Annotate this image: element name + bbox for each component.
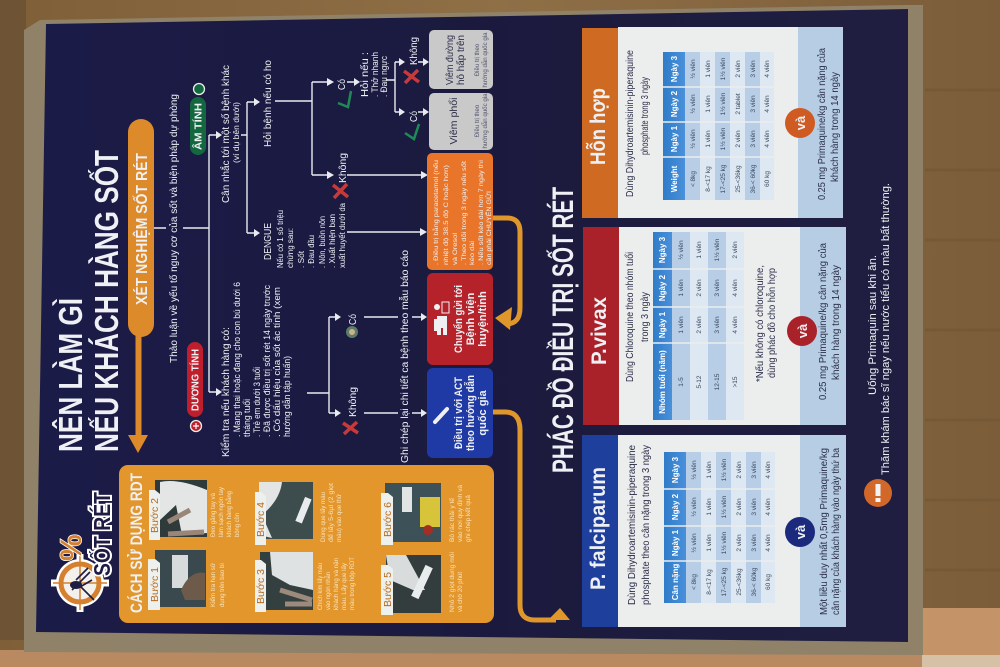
dosage table: 3 viên bbox=[750, 130, 757, 148]
dosage table: Ngày 3 bbox=[671, 456, 680, 483]
step 4 photo bbox=[259, 482, 313, 539]
panel: hỗn hợp bbox=[582, 27, 843, 218]
primaquine note: cân nặng của khách hàng vào ngày thứ ba bbox=[830, 448, 842, 615]
dosage table: 12-15 bbox=[714, 373, 721, 390]
và badge bbox=[785, 108, 815, 138]
dosage table: 1 viên bbox=[705, 95, 712, 113]
text: dengue: . Đau đầu bbox=[306, 235, 316, 268]
box: viêm phổi: hướng dẫn quốc gia bbox=[482, 93, 489, 149]
dosage table: 1 viên bbox=[706, 461, 713, 479]
dosage table: Ngày 1 bbox=[671, 529, 680, 556]
title bbox=[52, 150, 125, 452]
text: dengue: chứng sau: bbox=[285, 228, 295, 268]
dosage table: 1 viên bbox=[678, 316, 685, 334]
box: điều trị sốt (orange): . Theo dõi trong 3 ngày nếu sốt bbox=[459, 161, 468, 265]
intro: Dùng Dihydroartemisinin-piperaquine bbox=[625, 50, 636, 197]
step captions: để lấy 5-6µl (2 giọt bbox=[326, 483, 335, 542]
dosage table: 1 viên bbox=[696, 241, 703, 259]
dosage table: 4 viên bbox=[765, 498, 772, 516]
dosage table: Cân nặng bbox=[671, 564, 680, 600]
box: viêm đường hô hấp trên: Viêm đường bbox=[445, 35, 456, 85]
branch: có (chuyển gửi): Có bbox=[347, 314, 359, 325]
box: điều trị sốt (orange) bbox=[427, 153, 493, 270]
text: hỏi bệnh nếu có ho: Hỏi bệnh nếu có ho bbox=[262, 60, 274, 147]
text: hỏi nếu: . Đau ngực bbox=[379, 56, 390, 97]
icon: syringe bbox=[435, 409, 447, 422]
primaquine note: khách hàng trong 14 ngày bbox=[830, 72, 841, 182]
step tags: Bước 4 bbox=[256, 502, 267, 537]
dosage table: 2 viên bbox=[735, 130, 742, 148]
box: điều trị sốt (orange): và Oresol bbox=[452, 232, 459, 265]
footer notes: Thăm khám bác sĩ ngay nếu nước tiểu có màu bất thường. bbox=[880, 183, 892, 475]
dosage table: 4 viên bbox=[765, 534, 772, 552]
box: viêm phổi bbox=[429, 93, 493, 150]
dosage table: Ngày 2 bbox=[670, 90, 679, 117]
text: kiểm tra nếu khách hàng có: Kiểm tra nếu khách hàng có: bbox=[220, 327, 232, 457]
step tags: Bước 1 bbox=[150, 567, 161, 602]
primaquine note: 0.25 mg Primaquine/kg cân nặng của bbox=[816, 48, 828, 200]
dosage table: < 8kg bbox=[690, 171, 697, 187]
và badge: và bbox=[795, 323, 810, 338]
branch: không (ho) bbox=[333, 153, 349, 198]
step tags: Bước 3 bbox=[256, 569, 267, 604]
intro: phosphate theo cân nặng trong 3 ngày bbox=[641, 445, 652, 605]
text: dengue: . Nôn, buồn nôn bbox=[317, 216, 327, 268]
warning icon bbox=[864, 479, 892, 507]
text: cân nhắc bệnh khác bbox=[219, 65, 241, 203]
step captions: Kiểm tra hạn sử bbox=[209, 562, 217, 607]
dosage table: 1½ viên bbox=[713, 238, 721, 261]
dosage table: Nhóm tuổi (năm) bbox=[658, 350, 667, 414]
box: chuyển gửi (red) bbox=[427, 273, 493, 365]
step tags: Bước 2 bbox=[150, 498, 161, 533]
text: kiểm tra nếu khách hàng có: . Có dấu hiệu của sốt ác tính (xem bbox=[272, 287, 282, 437]
dosage table: Ngày 1 bbox=[658, 311, 667, 338]
dosage table: 2 viên bbox=[736, 461, 743, 479]
dosage table: 36-< 60kg bbox=[751, 567, 758, 597]
text: kiểm tra nếu khách hàng có: . Đã được điều trị sốt rét 14 ngày trước bbox=[262, 285, 272, 437]
step captions: máu. Lấy que lấy bbox=[339, 562, 348, 610]
step captions: bông cồn bbox=[232, 513, 241, 537]
branch: không (ACT): Không bbox=[347, 387, 359, 417]
dosage table: 2 viên bbox=[735, 60, 742, 78]
box: điều trị ACT (blue): quốc gia bbox=[477, 390, 489, 436]
dosage table: 3 viên bbox=[751, 498, 758, 516]
step captions: làm sạch ngón tay bbox=[218, 486, 225, 537]
box: viêm đường hô hấp trên: hô hấp trên bbox=[455, 35, 467, 85]
dosage table: ½ viên bbox=[689, 94, 697, 114]
dương tính badge: DƯƠNG TÍNH bbox=[188, 349, 202, 411]
primaquine note bbox=[818, 448, 842, 615]
dosage table: 1 viên bbox=[706, 534, 713, 552]
step captions: vào ngón nhẫn bbox=[323, 572, 332, 610]
text: hỏi nếu bbox=[359, 52, 390, 97]
intro bbox=[625, 50, 651, 197]
dosage table: 8-<17 kg bbox=[706, 569, 713, 595]
box: viêm phổi: Viêm phổi bbox=[448, 98, 460, 144]
branch: có (viêm phổi) bbox=[405, 111, 420, 139]
intro: Dùng Dihydroartemisinin-piperaquine bbox=[627, 445, 638, 605]
text: dengue bbox=[263, 203, 347, 268]
heading: phác đồ điều trị sốt rét: PHÁC ĐỒ ĐIỀU TRỊ SỐT RÉT bbox=[546, 187, 580, 473]
dương tính badge bbox=[187, 342, 203, 432]
intro: phosphate trong 3 ngày bbox=[640, 77, 651, 155]
dosage table: 25-<36kg bbox=[736, 568, 743, 596]
dosage table: 1½ viên bbox=[719, 127, 727, 150]
intro: trong 3 ngày bbox=[640, 292, 651, 342]
dosage table: 3 viên bbox=[751, 461, 758, 479]
text: kiểm tra nếu khách hàng có: hướng dẫn tập huấn) bbox=[282, 356, 292, 437]
dosage table: 1½ viên bbox=[719, 57, 727, 80]
text: cân nhắc bệnh khác: (ví dụ bên dưới) bbox=[231, 102, 241, 163]
dosage table: 1 viên bbox=[705, 60, 712, 78]
text: kiểm tra nếu khách hàng có: . Mang thai hoặc đang cho con bú dưới 6 bbox=[232, 282, 242, 437]
dosage table: ½ viên bbox=[677, 240, 685, 260]
branch: có (chuyển gửi) bbox=[346, 314, 359, 338]
dosage table: 1 viên bbox=[706, 498, 713, 516]
logo: sốt rét target bbox=[51, 492, 115, 612]
và badge bbox=[785, 517, 815, 547]
dosage table: Ngày 3 bbox=[658, 236, 667, 263]
intro bbox=[624, 252, 651, 382]
và badge bbox=[787, 316, 817, 346]
text: dengue: . Sốt bbox=[296, 250, 306, 268]
dosage table: ½ viên bbox=[690, 497, 698, 517]
dosage table: Weight bbox=[670, 165, 679, 192]
orange arrow: orange box to referral bbox=[493, 218, 520, 330]
text: dengue: xuất huyết dưới da bbox=[337, 203, 347, 268]
dosage table: ½ viên bbox=[689, 129, 697, 149]
box: điều trị ACT (blue): theo hướng dẫn bbox=[464, 375, 477, 451]
intro bbox=[627, 445, 652, 605]
dosage table: 4 viên bbox=[732, 316, 739, 334]
dosage table bbox=[653, 232, 744, 420]
dosage table: 1½ viên bbox=[720, 458, 728, 481]
intro: Dùng Chloroquine theo nhóm tuổi bbox=[624, 252, 636, 382]
dosage table: 4 viên bbox=[732, 279, 739, 297]
dosage table bbox=[664, 452, 775, 603]
text: cân nhắc bệnh khác: Cân nhắc tới một số bệnh khác bbox=[219, 65, 232, 203]
branch: không (ACT) bbox=[343, 387, 359, 434]
box: điều trị sốt (orange): . Nếu sốt kéo dài hơn 7 ngày thì bbox=[476, 160, 485, 265]
text: kiểm tra nếu khách hàng có bbox=[220, 282, 292, 457]
dosage table bbox=[663, 52, 774, 200]
dosage table: 4 viên bbox=[764, 95, 771, 113]
orange arrow: ACT to falciparum bbox=[493, 412, 570, 620]
orange pill: xét nghiệm sốt rét with arrow bbox=[128, 119, 154, 453]
dosage table: 2 viên bbox=[696, 316, 703, 334]
text: kiểm tra nếu khách hàng có: tháng tuổi bbox=[242, 399, 252, 437]
text: thảo luận: Thảo luận về yếu tố nguy cơ của sốt và biện pháp dự phòng bbox=[168, 94, 180, 363]
âm tính badge: ÂM TÍNH bbox=[192, 103, 204, 150]
step captions: Dùng que lấy máu bbox=[318, 492, 327, 542]
panel heading: CÁCH SỬ DỤNG RDT bbox=[127, 473, 146, 613]
dosage table: 1½ viên bbox=[719, 92, 727, 115]
step captions: Đeo găng tay và bbox=[210, 493, 217, 537]
primaquine note bbox=[816, 48, 841, 200]
box: viêm đường hô hấp trên: hướng dẫn quốc gia bbox=[482, 32, 489, 88]
step tags bbox=[148, 490, 394, 615]
dosage table: 25-<36kg bbox=[735, 165, 742, 193]
box: điều trị sốt (orange): . Điều trị bằng paracetamol (nếu bbox=[431, 160, 440, 265]
header: P.vivax bbox=[588, 297, 611, 365]
dosage table: Ngày 2 bbox=[671, 493, 680, 520]
box: điều trị sốt (orange): kéo dài bbox=[469, 240, 476, 265]
sốt rét wordmark: SỐT RÉT bbox=[88, 492, 115, 576]
chloroquine note: *Nếu không có chloroquine, bbox=[754, 265, 766, 382]
footer notes: Uống Primaquin sau khi ăn. bbox=[867, 255, 879, 395]
footer notes bbox=[867, 183, 892, 475]
box: viêm đường hô hấp trên bbox=[429, 30, 493, 89]
dosage table: 2 tablet bbox=[735, 93, 742, 115]
dosage table: 3 viên bbox=[714, 316, 721, 334]
dosage table: 36-< 60kg bbox=[750, 164, 757, 194]
branch: không (viêm đường hô hấp): Không bbox=[409, 37, 420, 65]
dosage table: Ngày 1 bbox=[670, 125, 679, 152]
box: viêm phổi: Điều trị theo bbox=[475, 104, 481, 137]
dosage table: 4 viên bbox=[764, 60, 771, 78]
step captions: dụng trên bao bì bbox=[219, 563, 226, 607]
và badge: và bbox=[793, 524, 808, 539]
primaquine note: khách hàng trong 14 ngày bbox=[831, 265, 842, 380]
dosage table: 2 viên bbox=[736, 498, 743, 516]
dosage table: 1-5 bbox=[678, 377, 685, 387]
dosage table: 17-<25 kg bbox=[721, 567, 728, 597]
dosage table: ½ viên bbox=[690, 460, 698, 480]
dosage table: 3 viên bbox=[714, 279, 721, 297]
dosage table: 17-<25 kg bbox=[720, 164, 727, 194]
text: hỏi nếu: Hỏi nếu : bbox=[359, 52, 371, 97]
dosage table: 4 viên bbox=[765, 461, 772, 479]
header: Hỗn hợp bbox=[586, 88, 610, 165]
text: ghi chép: Ghi chép lại chi tiết ca bệnh theo mẫu báo cáo bbox=[398, 250, 411, 463]
flow lines and arrows bbox=[154, 58, 429, 417]
dosage table: 3 viên bbox=[751, 534, 758, 552]
branch: có (ho): Có bbox=[337, 79, 348, 90]
dosage table: 2 viên bbox=[696, 279, 703, 297]
step tags: Bước 5 bbox=[383, 572, 394, 607]
dosage table: 2 viên bbox=[732, 241, 739, 259]
step 5 photo bbox=[386, 555, 441, 613]
step captions: máu) vào que thử bbox=[335, 493, 343, 542]
step captions: khách hàng và nặn bbox=[333, 558, 340, 610]
primaquine note: Một liều duy nhất 0,5mg Primaquine/kg bbox=[818, 448, 830, 615]
dosage table: < 8kg bbox=[691, 574, 698, 590]
primaquine note bbox=[817, 243, 842, 400]
text: kiểm tra nếu khách hàng có: . Trẻ em dưới 3 tuổi bbox=[252, 367, 262, 437]
dosage table: 1½ viên bbox=[720, 531, 728, 554]
dosage table: 1½ viên bbox=[720, 495, 728, 518]
step captions: ghi chép kết quả bbox=[463, 495, 472, 542]
box: điều trị sốt (orange): nhiệt độ 38.5 độ C hoặc hơn) bbox=[443, 165, 450, 265]
dosage table: 1 viên bbox=[705, 130, 712, 148]
dosage table: 1 viên bbox=[678, 279, 685, 297]
chloroquine note bbox=[754, 265, 778, 382]
box: điều trị ACT (blue) bbox=[427, 368, 493, 458]
step captions: Chích kim lấy máu bbox=[315, 563, 324, 610]
dosage table: 60 kg bbox=[764, 171, 771, 187]
primaquine note: 0.25 mg Primaquine/kg cân nặng của bbox=[817, 243, 829, 400]
step captions: Nhỏ 2 giọt dung môi bbox=[448, 552, 456, 612]
dosage table: Ngày 3 bbox=[670, 55, 679, 82]
percent sign: % bbox=[55, 534, 88, 561]
dosage table: ½ viên bbox=[690, 533, 698, 553]
icon: hospital bbox=[434, 302, 449, 335]
step 1 photo bbox=[155, 550, 206, 607]
và badge: và bbox=[793, 115, 808, 130]
dosage table: 2 viên bbox=[736, 534, 743, 552]
dosage table: 3 viên bbox=[750, 60, 757, 78]
dosage table: 5-12 bbox=[696, 375, 703, 389]
dosage table: 60 kg bbox=[765, 574, 772, 590]
dosage table: >15 bbox=[732, 376, 739, 388]
step captions bbox=[209, 483, 472, 612]
title: NẾU KHÁCH HÀNG SỐT bbox=[87, 150, 125, 452]
step 3 photo bbox=[260, 552, 313, 610]
step 2 photo bbox=[155, 480, 207, 537]
header: P. falciparum bbox=[587, 467, 610, 590]
step captions: máu trong hộp RDT bbox=[349, 557, 356, 610]
orange pill: xét nghiệm sốt rét with arrow: XÉT NGHIỆM SỐT RÉT bbox=[131, 153, 151, 305]
text: dengue: Nếu có 1 số triệu bbox=[275, 210, 285, 268]
chloroquine note: dùng phác đồ cho hỗn hợp bbox=[765, 268, 778, 378]
branch: không (viêm đường hô hấp) bbox=[404, 37, 420, 83]
box: chuyển gửi (red): Bệnh viện bbox=[465, 292, 477, 345]
step captions: vào nơi quy định và bbox=[457, 484, 464, 542]
panel: cách sử dụng RDT bbox=[119, 465, 494, 623]
dosage table: 8-<17 kg bbox=[705, 166, 712, 192]
box: điều trị sốt (orange): cần phải CHUYỂN GỬI bbox=[484, 191, 493, 265]
dosage table: 4 viên bbox=[764, 130, 771, 148]
step captions: và chờ 20 phút bbox=[457, 572, 464, 612]
text: dengue: . Xuất hiện ban bbox=[327, 214, 337, 268]
text: dengue: DENGUE bbox=[263, 223, 274, 260]
box: điều trị ACT (blue): Điều trị với ACT bbox=[453, 377, 465, 449]
panel: p. vivax bbox=[583, 227, 846, 425]
branch: không (ho): Không bbox=[338, 153, 349, 183]
âm tính badge bbox=[190, 84, 206, 155]
box: chuyển gửi (red): huyện/tỉnh bbox=[477, 291, 489, 347]
branch: có (ho) bbox=[337, 79, 351, 107]
panel: p. falciparum bbox=[582, 435, 846, 627]
step 6 photo bbox=[385, 483, 441, 542]
dosage table: ½ viên bbox=[689, 59, 697, 79]
box: chuyển gửi (red): Chuyển gửi tới bbox=[453, 285, 465, 353]
step tags: Bước 6 bbox=[383, 502, 394, 537]
step captions: khách hàng bằng bbox=[224, 491, 233, 537]
branch: có (viêm phổi): Có bbox=[409, 111, 420, 122]
text: hỏi nếu: . Thở nhanh bbox=[370, 52, 381, 97]
step captions: Bỏ rác thải y tế bbox=[447, 497, 456, 542]
dosage table: Ngày 2 bbox=[658, 274, 667, 301]
title: NÊN LÀM GÌ bbox=[52, 298, 89, 452]
box: viêm đường hô hấp trên: Điều trị theo bbox=[475, 43, 481, 76]
dosage table: 3 viên bbox=[750, 95, 757, 113]
